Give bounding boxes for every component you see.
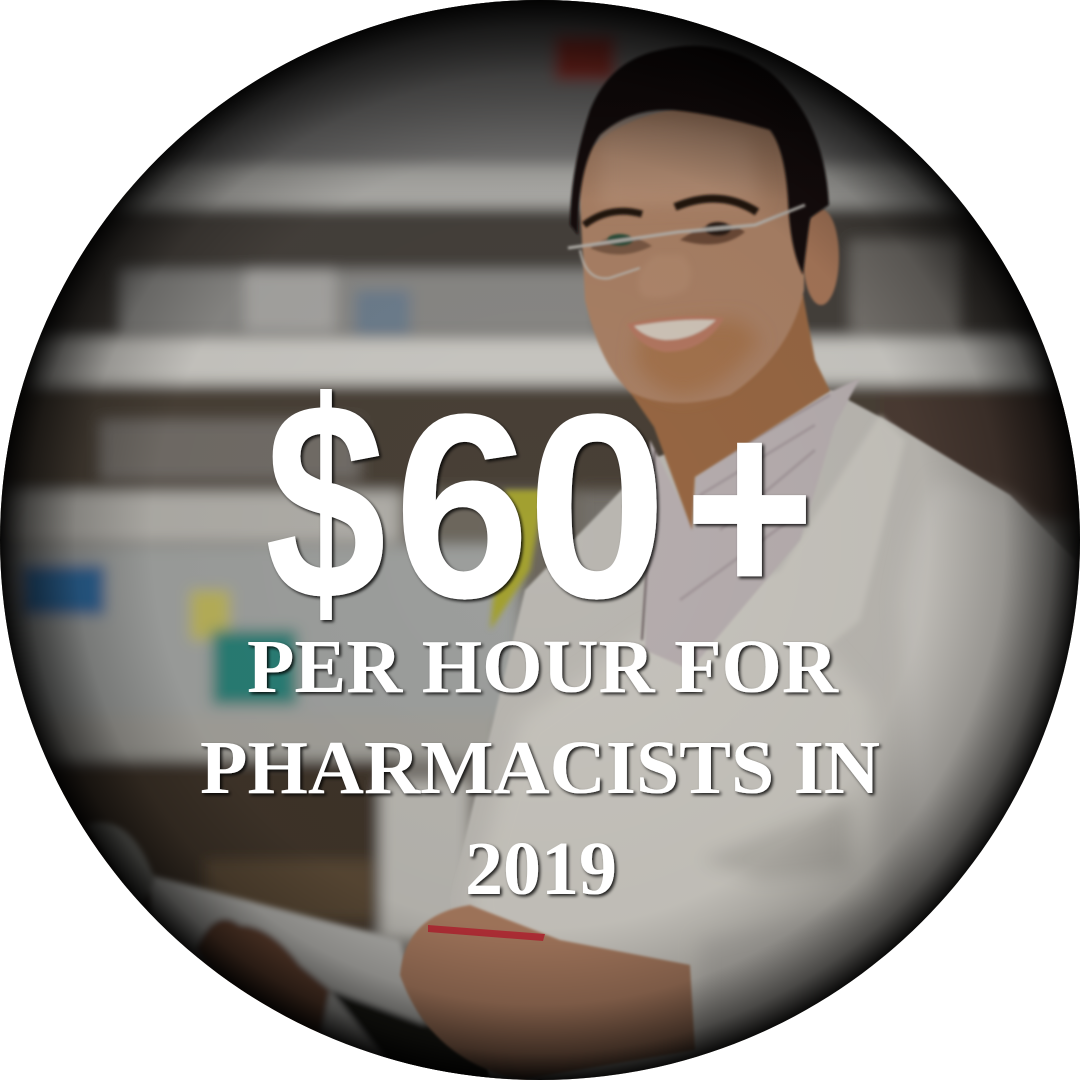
subheading: per hour for pharmacists in 2019: PHARMACISTS IN: [200, 726, 880, 810]
headline: $60+: 6: [394, 359, 530, 653]
right hand with pen: [400, 905, 695, 1080]
face shading: [600, 121, 760, 395]
subheading: per hour for pharmacists in 2019: [200, 625, 880, 911]
nose: [638, 255, 691, 298]
clipboard and left hand: [85, 822, 520, 1080]
coat lapel: [749, 412, 903, 644]
glasses, eyes and brows: [568, 199, 805, 278]
coat folds: [475, 482, 1062, 978]
ear: [803, 209, 839, 305]
face: [578, 107, 806, 403]
subheading: per hour for pharmacists in 2019: 2019: [465, 827, 617, 911]
headline: $60+: 0: [527, 359, 667, 653]
shirt: [642, 378, 860, 670]
lab coat: [450, 390, 1080, 1080]
hair: [570, 46, 829, 275]
subheading: per hour for pharmacists in 2019: PER HOUR FOR: [247, 625, 839, 709]
headline: $60+: $: [265, 343, 386, 659]
neck: [625, 295, 830, 530]
headline: $60+: [265, 343, 815, 659]
yellow bottle behind shoulder: [490, 490, 545, 630]
headline: $60+: +: [684, 359, 815, 653]
smile: [627, 316, 724, 352]
top shading: [194, 0, 883, 182]
